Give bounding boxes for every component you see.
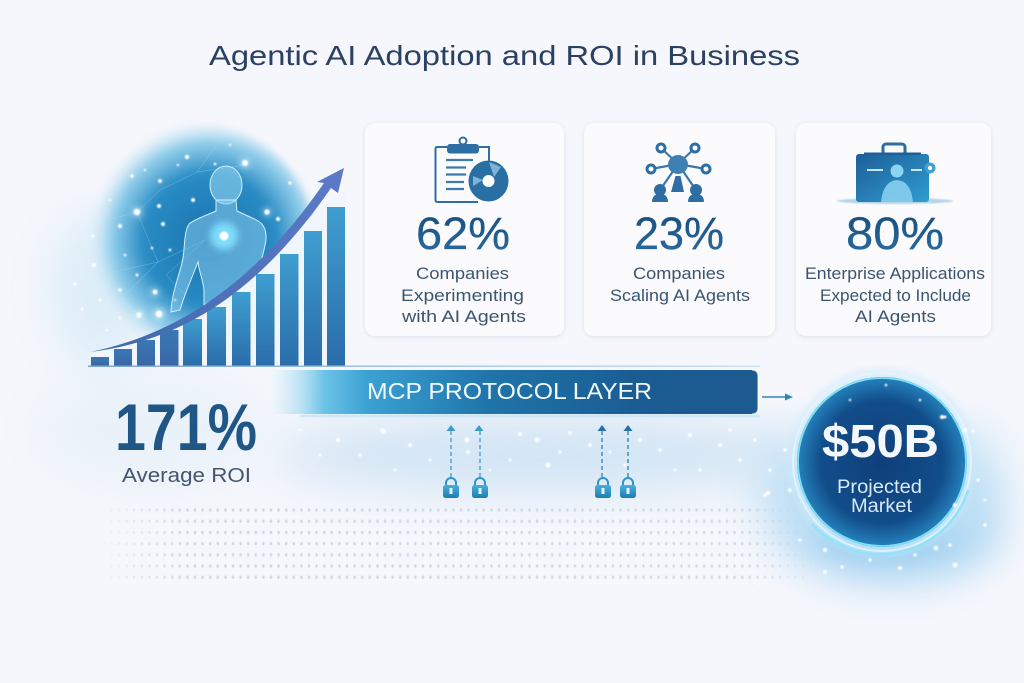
light wedge under arrow bbox=[92, 190, 345, 366]
label: enterprise applications with AI agents: AI Agents bbox=[855, 307, 936, 326]
value: 80%: 80% bbox=[846, 208, 944, 259]
label: enterprise applications with AI agents: Enterprise Applications bbox=[805, 264, 985, 283]
band label: MCP PROTOCOL LAYER bbox=[367, 378, 652, 404]
value: 171%: 171% bbox=[115, 390, 257, 464]
dotted grid bbox=[118, 508, 796, 579]
label: average ROI: Average ROI bbox=[122, 465, 251, 487]
title: Agentic AI Adoption and ROI in Business bbox=[209, 40, 800, 71]
label: projected market: Projected bbox=[837, 477, 922, 498]
background haze bbox=[30, 210, 1000, 575]
label: companies scaling AI agents bbox=[610, 264, 750, 305]
illustration: AI figure globe and growth chart bbox=[73, 123, 760, 367]
arrow: band to market bbox=[762, 394, 793, 400]
label: companies scaling AI agents: Companies bbox=[633, 264, 725, 283]
star halos bbox=[132, 158, 271, 320]
label: enterprise applications with AI agents bbox=[805, 264, 985, 326]
value: 62%: 62% bbox=[416, 208, 510, 259]
label: companies experimenting with AI agents: Experimenting bbox=[401, 286, 524, 305]
stars bbox=[73, 144, 292, 331]
dashed arrows bbox=[451, 431, 628, 477]
arrow heads bbox=[446, 425, 632, 431]
label: companies experimenting with AI agents: Companies bbox=[416, 264, 509, 283]
label: companies experimenting with AI agents bbox=[401, 264, 526, 326]
MCP protocol layer band bbox=[270, 370, 760, 417]
value: 23%: 23% bbox=[634, 208, 724, 259]
circle sparkles bbox=[766, 384, 987, 574]
globe bbox=[73, 123, 317, 367]
card: companies scaling bbox=[584, 123, 775, 336]
icon: clipboard with disc bbox=[436, 138, 508, 202]
human figure bbox=[171, 166, 266, 312]
icon: agent network bbox=[647, 144, 710, 202]
label: enterprise applications with AI agents: Expected to Include bbox=[820, 286, 971, 305]
icon: briefcase with AI agent bbox=[837, 144, 953, 204]
label: projected market: Market bbox=[851, 496, 913, 517]
label: projected market bbox=[837, 477, 922, 517]
label: companies scaling AI agents: Scaling AI Agents bbox=[610, 286, 750, 305]
label: companies experimenting with AI agents: with AI Agents bbox=[401, 307, 526, 326]
card: enterprise applications bbox=[796, 123, 991, 336]
sparkles under protocol layer bbox=[298, 428, 792, 497]
bar chart bbox=[88, 207, 760, 367]
lock icons bbox=[443, 478, 636, 498]
security arrows and locks bbox=[443, 425, 636, 498]
projected market circle bbox=[766, 368, 987, 574]
network lines bbox=[100, 140, 245, 330]
ROI stat bbox=[115, 390, 257, 487]
value: $50B: $50B bbox=[822, 415, 939, 467]
card: companies experimenting bbox=[365, 123, 564, 336]
growth arrow bbox=[90, 168, 344, 352]
